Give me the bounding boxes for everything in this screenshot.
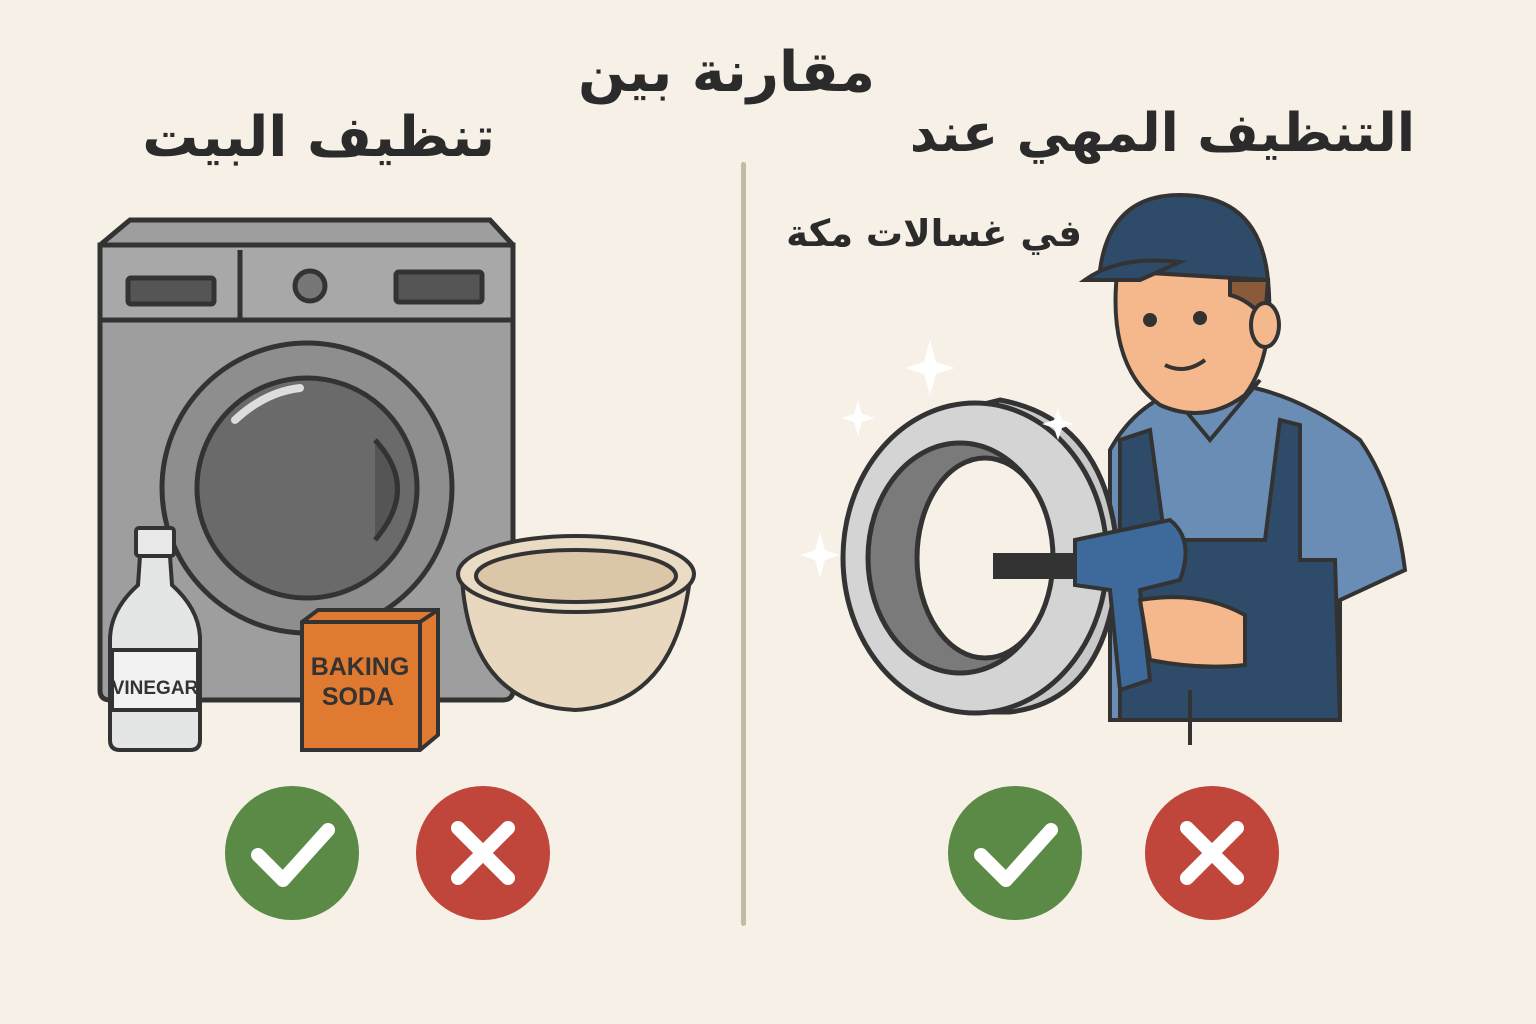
baking soda box: BAKING (311, 653, 409, 681)
vinegar bottle (110, 528, 200, 750)
drum (843, 400, 1118, 713)
icon: left check (225, 786, 359, 920)
baking soda box: SODA (322, 683, 394, 711)
sparkles (800, 340, 1074, 578)
title: مقارنة بين (578, 40, 875, 105)
baking soda box (302, 610, 438, 750)
icon: right check (948, 786, 1082, 920)
drill (995, 520, 1245, 745)
subheading: في غسالات مكة (786, 212, 1082, 255)
bowl (458, 536, 694, 710)
heading: professional cleaning: التنظيف المهي عند (910, 103, 1415, 164)
heading: home cleaning: تنظيف البيت (142, 105, 495, 170)
worker (1085, 195, 1405, 720)
washing machine (100, 220, 513, 700)
icon: left cross (416, 786, 550, 920)
vinegar bottle: VINEGAR (112, 678, 199, 699)
divider (741, 162, 746, 926)
icon: right cross (1145, 786, 1279, 920)
